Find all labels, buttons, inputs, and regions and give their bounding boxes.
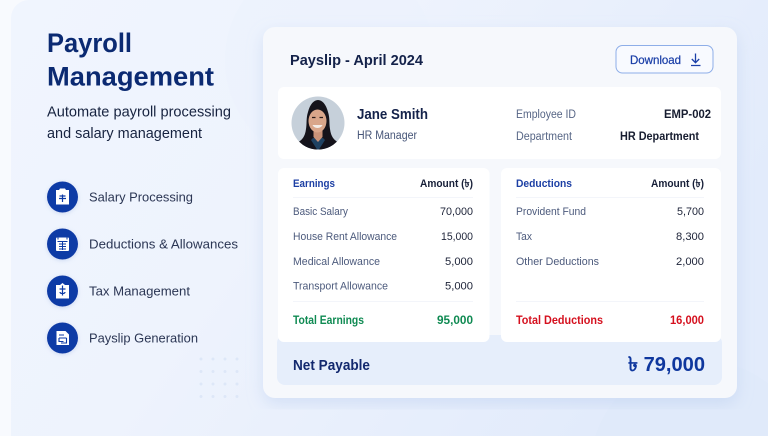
earnings rows: Medical Allowance [293,256,380,268]
download button [616,46,713,73]
deductions header: Deductions [516,178,572,190]
avatar [292,96,344,153]
deductions header [516,178,704,190]
net payable bar [277,335,722,385]
total earnings: Total Earnings [293,315,364,327]
earnings rows: 15,000 [441,231,473,243]
deductions rows: 8,300 [676,231,704,243]
title [47,28,214,92]
earnings rows: 5,000 [445,256,473,268]
deductions rows: Tax [516,231,532,243]
feature: tax management: Tax Management [89,284,190,298]
total earnings: 95,000 [437,315,473,327]
deductions rows: 5,700 [677,206,704,218]
feature: tax management [47,276,190,306]
department: HR Department [620,131,699,143]
subtitle: Automate payroll processing [47,104,231,120]
earnings rows: House Rent Allowance [293,231,397,243]
feature list [47,182,238,354]
department: Department [516,131,573,143]
total deductions: Total Deductions [516,315,603,327]
earnings header [293,178,473,190]
earnings header: Earnings [293,178,335,190]
employee role: HR Manager [357,130,417,142]
icon: download arrow [691,54,700,66]
earnings rows [293,206,473,292]
total earnings [293,315,473,327]
payslip card [263,27,737,398]
download button: Download [630,53,681,67]
earnings rows: 70,000 [440,206,473,218]
deductions header: Amount (৳) [651,178,704,190]
payslip heading: Payslip - April 2024 [290,52,424,69]
decorative dot grid [200,358,238,398]
earnings header: Amount (৳) [420,178,473,190]
title: Payroll [47,28,132,58]
earnings rows: 5,000 [445,280,473,292]
deductions rows [516,206,704,268]
feature: deductions and allowances [47,228,238,260]
feature: salary processing [47,182,193,212]
earnings rows: Transport Allowance [293,280,388,292]
deductions rows: Provident Fund [516,206,586,218]
net payable bar: Net Payable [293,358,370,374]
employee profile panel [278,87,721,159]
employee id: Employee ID [516,109,576,121]
deductions table [501,168,721,342]
subtitle [47,104,231,142]
total deductions [516,315,704,327]
employee id: EMP-002 [664,109,711,121]
earnings table [278,168,490,342]
department [516,131,699,143]
total deductions: 16,000 [670,315,704,327]
deductions rows: Other Deductions [516,256,599,268]
title: Management [47,62,214,92]
feature: payslip generation: Payslip Generation [89,330,198,346]
employee id [516,109,711,121]
net payable bar: ৳ 79,000 [628,354,705,376]
feature: payslip generation [47,322,198,354]
subtitle: and salary management [47,126,202,142]
feature: deductions and allowances: Deductions & Allowances [89,236,238,252]
deductions rows: 2,000 [676,256,704,268]
feature: salary processing: Salary Processing [89,190,193,204]
earnings rows: Basic Salary [293,206,348,218]
employee name: Jane Smith [357,107,428,123]
